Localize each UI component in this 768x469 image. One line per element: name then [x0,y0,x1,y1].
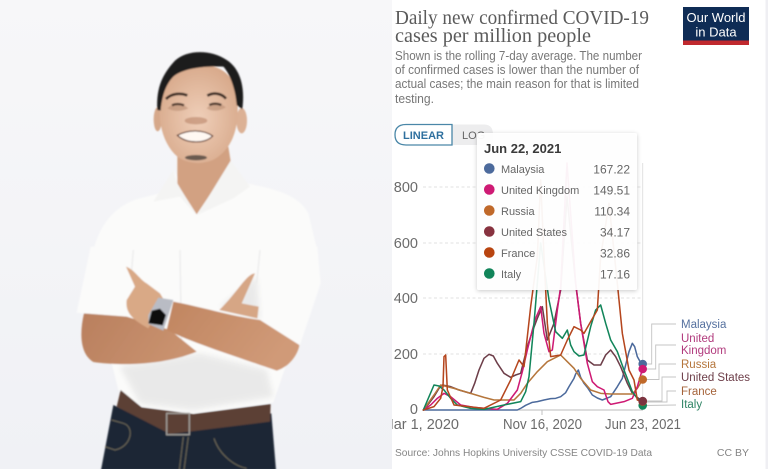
series end labels: Italy [681,399,702,411]
chart title: Daily new confirmed COVID-19 [395,7,649,29]
tooltip row: France: 32.86 [600,246,630,260]
goatee [185,155,207,160]
y axis labels: 600 [394,236,418,252]
series: United States [423,197,643,410]
neck [177,147,231,214]
y axis labels [394,180,418,418]
series: Malaysia [423,343,643,410]
chart title [395,7,649,47]
tooltip row: Italy: Italy [501,269,522,281]
tooltip row: United States [484,226,630,237]
series: Italy [423,243,643,410]
tooltip row: United Kingdom: 149.51 [593,184,630,198]
shirt shoulders [93,162,317,251]
y axis labels: 800 [394,180,418,196]
chart gridlines and axes [423,163,643,415]
eye shadows [167,103,226,111]
jeans pockets [105,420,247,469]
left hand [126,267,164,328]
shirt collar [153,161,250,215]
tooltip row: Russia [484,205,630,216]
x axis labels: Mar 1, 2020 [382,417,459,433]
chart subtitle: actual cases; the main reason for that is limited [395,77,639,91]
tooltip row: United Kingdom: United Kingdom [501,185,579,197]
x axis labels: Nov 16, 2020 [503,417,582,433]
tooltip row: Italy [484,268,630,280]
wristwatch [148,298,173,331]
scale toggle: linear / log [395,124,493,145]
series: United Kingdom [423,163,643,410]
left sleeve [77,247,135,318]
arm: lower forearm [81,313,197,364]
hair [157,52,243,111]
belt buckle [167,413,189,435]
lower body [77,247,321,469]
tooltip row: Russia: 110.34 [594,204,630,218]
shirt creases [132,250,260,360]
tooltip row: Malaysia: Malaysia [501,164,545,176]
chart subtitle: of confirmed cases is lower than the number of [395,63,639,77]
right hand [219,273,259,318]
shirt body [93,247,321,413]
line chart: country series [423,163,643,410]
jeans [101,405,276,469]
face [159,65,238,163]
licence note: CC BY [717,447,749,459]
watch screen [148,309,166,325]
series end labels: United States [681,372,750,384]
series end labels: United [681,333,714,345]
series end labels: Malaysia [681,319,727,331]
scale toggle: linear / log: LINEAR [403,130,444,142]
series end dots [638,360,647,410]
source note: Source: Johns Hopkins University CSSE COVID-19 Data [395,447,652,459]
tooltip row: Italy: 17.16 [600,268,630,282]
right ear [236,108,247,133]
tooltip row: France [484,247,630,258]
tooltip row: United Kingdom [484,184,630,196]
belt [117,390,271,434]
nose shadow [185,117,207,124]
chart subtitle: Shown is the rolling 7-day average. The number [395,49,642,63]
shirt shading [120,277,273,410]
tooltip row: France: France [501,248,535,260]
eyes [172,104,221,105]
eyebrows [166,94,226,99]
right edge strip [766,0,768,469]
series: France [423,180,643,410]
scale toggle: linear / log: LOG [462,130,485,142]
series end labels: Kingdom [681,345,726,357]
tooltip row: United States: 34.17 [600,226,630,240]
series end labels: Russia [681,359,717,371]
arm: upper forearm [167,302,299,371]
smile [177,131,213,142]
tooltip row: Russia: Russia [501,206,536,218]
series: Russia [423,355,643,410]
x axis labels [392,419,680,431]
left ear [154,107,162,131]
chart subtitle: testing. [395,92,434,106]
series end labels [681,319,750,411]
chart title: cases per million people [395,25,591,47]
series end labels: France [681,386,717,398]
tooltip row: Malaysia [484,163,630,176]
tooltip: Jun 22, 2021: Jun 22, 2021 [484,141,561,156]
x axis labels: Jun 23, 2021 [605,417,681,433]
tooltip row: Malaysia: 167.22 [593,162,630,176]
photo: man with crossed arms [77,52,321,469]
y axis labels: 400 [394,291,418,307]
panel: chart card [392,7,750,458]
tooltip: Jun 22, 2021 [477,133,637,290]
upper body and head [93,52,317,251]
logo: Our World in Data: Our World [686,10,746,25]
panel: portrait background [0,0,392,469]
chart subtitle [395,49,642,106]
logo: Our World in Data [683,7,749,45]
y axis labels: 200 [394,347,418,363]
series end connectors [644,324,676,406]
tooltip row: United States: United States [501,227,568,239]
logo: Our World in Data: in Data [695,24,737,40]
y axis labels: 0 [410,402,418,418]
